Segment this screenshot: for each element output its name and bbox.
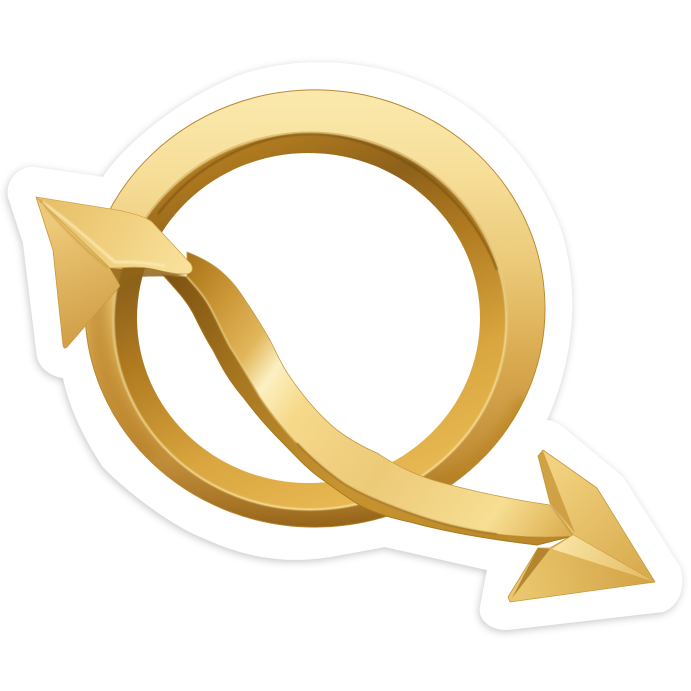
- upper fold: [538, 450, 655, 582]
- head crease: [42, 202, 165, 266]
- ring shading: [97, 270, 525, 527]
- lower fold: [508, 535, 655, 602]
- right arrowhead: [508, 450, 655, 602]
- ring seam shadow top: [158, 134, 497, 270]
- ring lower right shading: [430, 400, 525, 490]
- crease highlight: [552, 535, 655, 582]
- ring outer face: [85, 90, 545, 527]
- shaft seam: [187, 277, 297, 443]
- head crease shadow: [40, 200, 108, 268]
- ring inner bevel: [113, 132, 507, 510]
- ring: [85, 90, 545, 527]
- ring bottom shading: [246, 516, 384, 527]
- head back fold: [36, 197, 120, 348]
- shaft top face: [187, 252, 573, 537]
- ribbon arrow shaft: [163, 252, 573, 545]
- ring left face shading: [97, 270, 150, 460]
- left arrowhead: [36, 197, 192, 348]
- head upper fold: [36, 197, 192, 274]
- head lower shadow: [110, 268, 187, 288]
- shaft dark lower seam: [297, 443, 497, 534]
- ring seam highlight: [114, 132, 506, 509]
- shaft lower bevel: [163, 275, 573, 545]
- lower notch shade: [512, 548, 550, 598]
- shadow side: [538, 451, 575, 533]
